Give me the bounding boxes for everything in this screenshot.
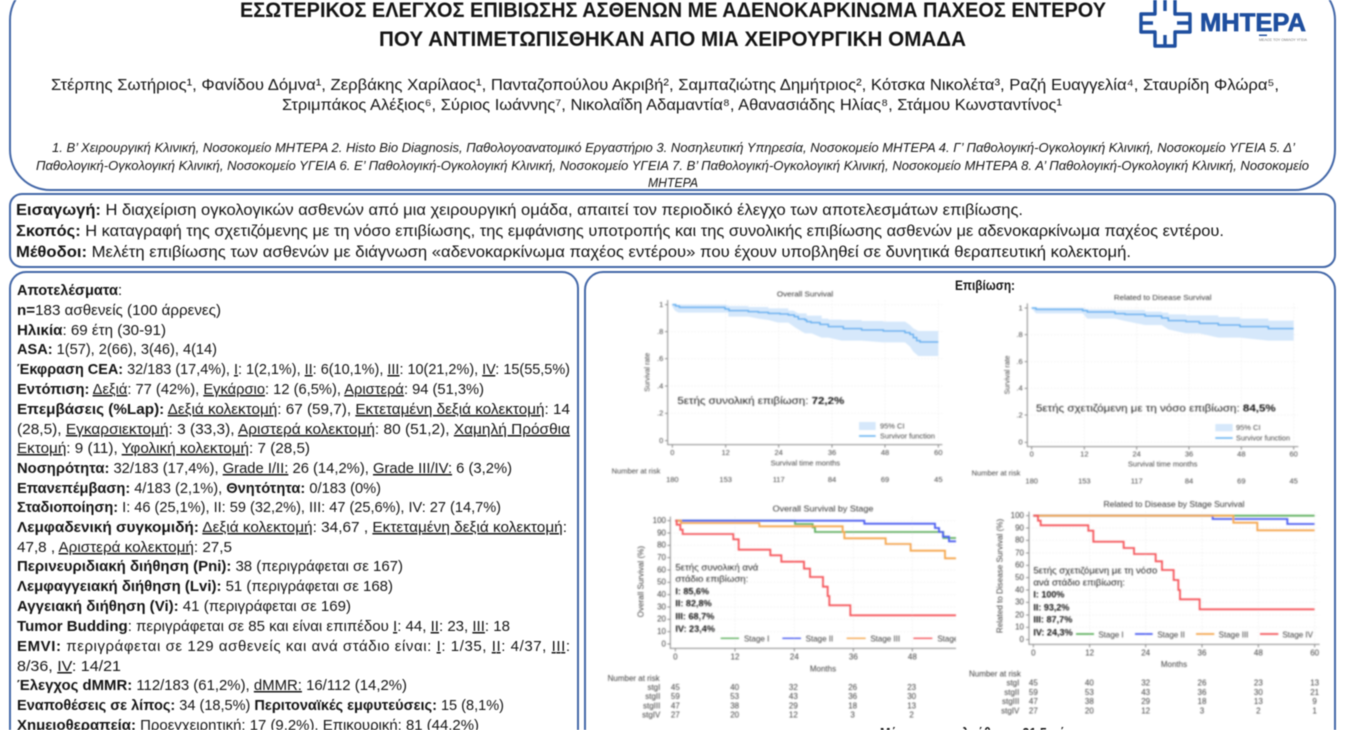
chart: related to disease survival by stage: 20: [1015, 610, 1025, 619]
panel: results: EMVI: περιγράφεται σε 129 ασθενείς και ανά στάδιο είναι: I: 1/35, II: 4/37, III:: [17, 638, 570, 655]
chart: overall survival by stage: Months: [810, 664, 836, 673]
callout: 5-year survival by stage: [675, 562, 758, 634]
panel: results: Ηλικία: 69 έτη (30-91): [17, 322, 166, 339]
callout: 5-year disease-related survival: 5ετής σχετιζόμενη με τη νόσο επιβίωση: 84,5%: [1036, 402, 1276, 414]
panel: results: Αγγειακή διήθηση (Vi): 41 (περιγράφεται σε 169): [17, 598, 351, 615]
callout: 5-year survival by stage: I: 85,6%: [675, 587, 709, 597]
risk table: 3: [850, 711, 855, 720]
chart: related to disease survival by stage: 60: [1310, 649, 1320, 658]
chart: related to disease survival: 0: [1030, 450, 1034, 459]
chart: overall survival by stage: 90: [657, 528, 667, 537]
risk table: 45: [1029, 679, 1038, 688]
risk table: 23: [1254, 679, 1263, 688]
callout: 5-year disease-related survival by stage: 5ετής σχετιζόμενη με τη νόσο: [1033, 566, 1157, 576]
chart: overall survival: 48: [881, 448, 889, 457]
legend: Stage II: [1157, 630, 1185, 639]
chart: related to disease survival by stage: Number at risk: [969, 670, 1021, 679]
affiliations: ΜΗΤΕΡΑ: [648, 175, 698, 190]
callout: 5-year survival by stage: στάδιο επιβίωση:: [675, 574, 748, 584]
legend: [859, 421, 935, 441]
risk table: 45: [671, 683, 680, 692]
chart: overall survival: 45: [934, 475, 942, 484]
panel: results: Επανεπέμβαση: 4/183 (2,1%), Θνητότητα: 0/183 (0%): [17, 480, 381, 497]
panel: results: ASA: 1(57), 2(66), 3(46), 4(14): [17, 341, 217, 358]
risk table: 18: [1198, 697, 1207, 706]
chart: overall survival by stage: Overall Survival (%): [636, 546, 645, 617]
risk table: 13: [1310, 679, 1320, 688]
chart: related to disease survival by stage: Related to Disease by Stage Survival: [1103, 500, 1245, 509]
risk table: 9: [1312, 697, 1317, 706]
chart: related to disease survival by stage: [969, 500, 1320, 715]
callout: 5-year survival by stage: 5ετής συνολική ανά: [675, 562, 758, 572]
risk table: 59: [671, 692, 680, 701]
chart: related to disease survival: 36: [1185, 450, 1193, 459]
panel: results: Λεμφαδενική συγκομιδή: Δεξιά κολεκτομή: 34,67 , Εκτεταμένη δεξιά κολεκτομή :: [17, 519, 567, 536]
legend: [1076, 630, 1314, 639]
chart: overall survival: Overall Survival: [777, 289, 833, 298]
chart: overall survival: .8: [657, 327, 663, 336]
panel: introduction, aim, methods: [10, 194, 1335, 267]
risk table: 53: [1085, 688, 1094, 697]
chart: related to disease survival: 0: [1018, 438, 1023, 447]
chart: overall survival by stage: 0: [662, 639, 667, 648]
risk table: stgIII: [1002, 697, 1019, 706]
chart: related to disease survival by stage: 48: [1254, 649, 1263, 658]
title: ΠΟΥ ΑΝΤΙΜΕΤΩΠΙΣΘΗΚΑΝ ΑΠΟ ΜΙΑ ΧΕΙΡΟΥΡΓΙΚΗ ΟΜΑΔΑ: [379, 27, 966, 51]
risk table: 38: [730, 701, 740, 710]
chart: overall survival: .6: [657, 354, 663, 363]
risk table: 29: [1141, 697, 1151, 706]
risk table: 18: [848, 701, 858, 710]
risk table: 30: [1254, 688, 1263, 697]
chart: overall survival by stage: 50: [657, 578, 667, 587]
panel: introduction, aim, methods: Μέθοδοι: Μελέτη επιβίωσης των ασθενών με διάγνωση «αδενοκαρκίνωμα παχέος εντέρου» που έχουν υποβληθεί σε δυνητικά θεραπευτική κολεκτομή.: [16, 244, 1131, 261]
risk table: stgI: [1006, 679, 1019, 688]
chart: related to disease survival by stage: 0: [1031, 649, 1036, 658]
panel: header: [10, 0, 1335, 190]
risk table: 1: [1312, 706, 1317, 715]
chart: overall survival by stage: 36: [849, 653, 858, 662]
affiliations: 1. Β’ Χειρουργική Κλινική, Νοσοκομείο ΜΗΤΕΡΑ 2. Histo Bio Diagnosis, Παθολογοανατομικό Εργαστήριο 3. Νοσηλευτική Υπηρεσία, Νοσοκομείο ΜΗΤΕΡΑ 4. Γ’ Παθολογική-Ογκολογική Κλινική, Νοσοκομείο ΥΓΕΙΑ 5. Δ’: [52, 140, 1296, 155]
risk table: 27: [1029, 706, 1038, 715]
chart: overall survival by stage: 12: [731, 653, 740, 662]
chart: related to disease survival: 45: [1289, 476, 1298, 485]
risk table: 23: [907, 683, 917, 692]
legend: Stage II: [806, 635, 833, 644]
legend: Stage I: [744, 635, 769, 644]
legend: 95% CI: [880, 421, 905, 430]
panel: results: Αποτελέσματα:: [17, 282, 122, 299]
chart: related to disease survival: 69: [1237, 476, 1245, 485]
chart: related to disease survival: Related to Disease Survival: [1114, 293, 1212, 302]
chart: overall survival: Survival rate: [645, 353, 652, 392]
legend: Stage IV: [1282, 630, 1314, 639]
risk table: 32: [1141, 679, 1151, 688]
chart: related to disease survival: 60: [1289, 450, 1298, 459]
panel: results: Έλεγχος dMMR: 112/183 (61,2%), dMMR: 16/112 (14,2%): [17, 677, 407, 694]
risk table: stgII: [645, 692, 660, 701]
callout: 5-year disease-related survival by stage: III: 87,7%: [1033, 614, 1072, 624]
chart: overall survival: .2: [657, 409, 663, 418]
chart: overall survival: 24: [775, 448, 783, 457]
authors: [51, 77, 1279, 114]
callout: 5-year disease-related survival by stage: I: 100%: [1033, 590, 1064, 600]
risk table: 40: [730, 683, 740, 692]
callout: 5-year survival by stage: II: 82,8%: [675, 599, 712, 609]
chart: related to disease survival by stage: 36: [1198, 649, 1207, 658]
risk table: 40: [1085, 679, 1094, 688]
chart: overall survival by stage: 24: [790, 653, 799, 662]
risk table: 21: [1310, 688, 1320, 697]
risk table: 29: [789, 701, 798, 710]
panel: results: Περινευριδιακή διήθηση (Pni): 38 (περιγράφεται σε 167): [17, 558, 403, 575]
chart: related to disease survival by stage: 60: [1015, 561, 1025, 570]
panel: results: Tumor Budding: περιγράφεται σε 85 και είναι επιπέδου I: 44, II: 23, III: 18: [17, 618, 510, 635]
chart: overall survival: 0: [670, 448, 674, 457]
chart: overall survival by stage: Overall Survival by Stage: [773, 504, 874, 514]
chart: related to disease survival: 12: [1080, 450, 1088, 459]
risk table: [642, 683, 917, 720]
icon: logo: ΜΕΛΟΣ ΤΟΥ ΟΜΙΛΟΥ ΥΓΕΙΑ: [1259, 37, 1307, 42]
chart: related to disease survival: .4: [1016, 384, 1023, 393]
risk table: 36: [1198, 688, 1207, 697]
icon: logo: ΜΗΤΕΡΑ: [1200, 9, 1306, 37]
chart: overall survival: .4: [657, 381, 663, 390]
chart: related to disease survival by stage: 40: [1015, 585, 1025, 594]
affiliations: Παθολογική-Ογκολογική Κλινική, Νοσοκομείο ΥΓΕΙΑ 6. Ε’ Παθολογική-Ογκολογική Κλινική, Νοσοκομείο ΥΓΕΙΑ 7. Β’ Παθολογική-Ογκολογική Κλινική, Νοσοκομείο ΜΗΤΕΡΑ 8. Α’ Παθολογική-Ογκολογική Κλινική, Νοσοκομείο: [36, 158, 1309, 173]
risk table: stgII: [1004, 688, 1019, 697]
callout: 5-year disease-related survival by stage: II: 93,2%: [1033, 602, 1069, 612]
chart: related to disease survival: 48: [1237, 450, 1245, 459]
risk table: [1001, 679, 1320, 715]
panel: results: Εκτομή: 9 (11), Υφολική κολεκτομή: 7 (28,5): [17, 440, 310, 457]
chart: related to disease survival: [972, 293, 1298, 485]
chart: overall survival: 12: [722, 448, 730, 457]
chart: related to disease survival: 180: [1025, 476, 1038, 485]
risk table: 12: [1141, 706, 1151, 715]
risk table: stgIV: [642, 711, 661, 720]
chart: related to disease survival by stage: 80: [1015, 536, 1025, 545]
authors: Στέρπης Σωτήριος¹, Φανίδου Δόμνα¹, Ζερβάκης Χαρίλαος¹, Πανταζοπούλου Ακριβή², Σαμπαζιώτης Δημήτριος², Κότσκα Νικολέτα³, Ραζή Ευαγγελία⁴, Σταυρίδη Φλώρα⁵,: [51, 77, 1279, 94]
chart: overall survival by stage: 70: [657, 553, 667, 562]
chart: related to disease survival: Survival time months: [1128, 459, 1198, 468]
chart: overall survival by stage: 20: [657, 615, 667, 624]
legend: Survivor function: [880, 432, 935, 441]
panel: introduction, aim, methods: Εισαγωγή: Η διαχείριση ογκολογικών ασθενών από μια χειρουργική ομάδα, απαιτεί τον περιοδικό έλεγχο των αποτελεσμάτων επιβίωσης.: [16, 202, 1023, 219]
risk table: stgIV: [1001, 706, 1020, 715]
panel: results: Νοσηρότητα: 32/183 (17,4%), Grade I/II: 26 (14,2%), Grade III/IV: 6 (3,2%): [17, 460, 512, 477]
legend: Stage IV: [937, 635, 969, 644]
panel: results: Σταδιοποίηση: I: 46 (25,1%), II: 59 (32,2%), III: 47 (25,6%), IV: 27 (14,7%): [17, 499, 501, 516]
chart: related to disease survival: .8: [1016, 330, 1023, 339]
authors: Στριμπάκος Αλέξιος⁶, Σύριος Ιωάννης⁷, Νικολαΐδη Αδαμαντία⁸, Αθανασιάδης Ηλίας⁸, Στάμου Κωνσταντίνος¹: [282, 97, 1062, 114]
legend: Survivor function: [1236, 433, 1290, 442]
risk table: 53: [730, 692, 740, 701]
chart: overall survival: Survival time months: [771, 458, 840, 467]
heading: survival: Επιβίωση:: [955, 277, 1015, 293]
risk table: 36: [848, 692, 858, 701]
chart: overall survival by stage: Number at risk: [608, 674, 660, 683]
chart: overall survival: Number at risk: [612, 467, 661, 476]
risk table: 2: [909, 711, 914, 720]
callout: 5-year survival by stage: III: 68,7%: [675, 611, 714, 621]
chart: related to disease survival: 117: [1131, 476, 1143, 485]
callout: 5-year survival by stage: IV: 23,4%: [675, 624, 715, 634]
chart: overall survival: 36: [828, 448, 836, 457]
legend: [1215, 423, 1290, 442]
chart: related to disease survival by stage: 100: [1011, 511, 1025, 520]
risk table: 43: [789, 692, 798, 701]
risk table: 27: [671, 711, 680, 720]
panel: results: 8/36, IV: 14/21: [17, 658, 121, 675]
callout: 5-year disease-related survival by stage: IV: 24,3%: [1033, 627, 1073, 637]
chart: related to disease survival by stage: 12: [1085, 649, 1095, 658]
chart: related to disease survival by stage: 70: [1015, 548, 1025, 557]
chart: related to disease survival by stage: 24: [1141, 649, 1151, 658]
panel: results: Επεμβάσεις (%Lap): Δεξιά κολεκτομή: 67 (59,7), Εκτεταμένη δεξιά κολεκτομή: 14: [17, 401, 570, 418]
chart: related to disease survival: 153: [1078, 476, 1091, 485]
chart: overall survival: 153: [719, 475, 732, 484]
panel: results: 47,8 , Αριστερά κολεκτομή: 27,5: [17, 539, 232, 556]
chart: overall survival by stage: 100: [653, 516, 667, 525]
chart: related to disease survival by stage: 0: [1020, 635, 1025, 644]
risk table: 43: [1141, 688, 1151, 697]
risk table: stgIII: [643, 701, 660, 710]
panel: results: n=183 ασθενείς (100 άρρενες): [17, 302, 221, 319]
risk table: 38: [1085, 697, 1094, 706]
chart: related to disease survival: Survival rate: [1004, 355, 1011, 394]
title: [240, 0, 1106, 51]
chart: overall survival: 117: [773, 475, 785, 484]
risk table: 30: [907, 692, 917, 701]
panel: results: [10, 272, 578, 730]
risk table: 20: [730, 711, 740, 720]
chart: related to disease survival: 1: [1018, 304, 1023, 313]
legend: [721, 635, 969, 644]
chart: related to disease survival by stage: Related to Disease Survival (%): [996, 518, 1005, 633]
affiliations: [36, 140, 1309, 190]
chart: related to disease survival by stage: Months: [1161, 660, 1187, 669]
risk table: 59: [1029, 688, 1038, 697]
chart: overall survival by stage: 60: [657, 565, 667, 574]
legend: Stage III: [870, 635, 900, 644]
panel: results: (28,5), Εγκαρσιεκτομή: 3 (33,3), Αριστερά κολεκτομή : 80 (51,2), Χαμηλή Πρόσθια: [17, 421, 570, 438]
panel: survival: [585, 272, 1335, 730]
risk table: 47: [671, 701, 680, 710]
chart: related to disease survival: 24: [1133, 450, 1141, 459]
chart: related to disease survival: 84: [1185, 476, 1193, 485]
chart: overall survival: 180: [666, 475, 679, 484]
chart: related to disease survival by stage: 90: [1015, 523, 1025, 532]
panel: results: Έκφραση CEA: 32/183 (17,4%), I: 1(2,1%), II: 6(10,1%), III: 10(21,2%), IV: 15(55,5%): [17, 361, 570, 378]
chart: overall survival by stage: 80: [657, 541, 667, 550]
risk table: 3: [1200, 706, 1205, 715]
chart: overall survival: 0: [659, 436, 663, 445]
panel: results: Εναποθέσεις σε λίπος: 34 (18,5%) Περιτοναϊκές εμφυτεύσεις: 15 (8,1%): [17, 697, 504, 714]
chart: overall survival: 1: [659, 300, 663, 309]
chart: overall survival: [612, 289, 942, 484]
panel: introduction, aim, methods: Σκοπός: Η καταγραφή της σχετιζόμενης με τη νόσο επιβίωσης, της εμφάνισης υποτροπής και της συνολικής επιβίωσης ασθενών με αδενοκαρκίνωμα παχέος εντέρου.: [16, 223, 1224, 240]
risk table: stgI: [647, 683, 660, 692]
chart: overall survival by stage: [608, 504, 969, 720]
callout: 5-year disease-related survival by stage: ανά στάδιο επιβίωση:: [1033, 577, 1125, 587]
icon: logo: [1141, 0, 1307, 46]
chart: overall survival: 84: [828, 475, 836, 484]
risk table: 47: [1029, 697, 1038, 706]
risk table: 13: [1254, 697, 1263, 706]
risk table: 12: [789, 711, 798, 720]
chart: related to disease survival: Number at risk: [972, 468, 1021, 477]
chart: related to disease survival by stage: 30: [1015, 598, 1025, 607]
callout: 5-year overall survival: 5ετής συνολική επιβίωση: 72,2%: [677, 395, 844, 407]
chart: overall survival by stage: 30: [657, 602, 667, 611]
panel: results: Λεμφαγγειακή διήθηση (Lvi): 51 (περιγράφεται σε 168): [17, 578, 393, 595]
legend: Stage I: [1098, 630, 1124, 639]
chart: related to disease survival by stage: 50: [1015, 573, 1025, 582]
risk table: 26: [848, 683, 858, 692]
legend: Stage III: [1219, 630, 1248, 639]
chart: overall survival by stage: 0: [673, 653, 678, 662]
chart: related to disease survival: .6: [1016, 357, 1023, 366]
chart: related to disease survival: .2: [1016, 410, 1023, 419]
panel: results: Εντόπιση: Δεξιά: 77 (42%), Εγκάρσιο: 12 (6,5%), Αριστερά: 94 (51,3%): [17, 381, 484, 398]
risk table: 20: [1085, 706, 1094, 715]
chart: overall survival by stage: 40: [657, 590, 667, 599]
callout: 5-year disease-related survival by stage: [1033, 566, 1157, 637]
risk table: 32: [789, 683, 798, 692]
legend: 95% CI: [1236, 423, 1261, 432]
chart: overall survival: 69: [881, 475, 889, 484]
risk table: 2: [1256, 706, 1261, 715]
chart: overall survival by stage: 10: [657, 627, 667, 636]
chart: overall survival by stage: 48: [908, 653, 917, 662]
chart: overall survival: 60: [934, 448, 942, 457]
chart: related to disease survival by stage: 10: [1015, 623, 1025, 632]
risk table: 13: [907, 701, 917, 710]
risk table: 26: [1198, 679, 1207, 688]
